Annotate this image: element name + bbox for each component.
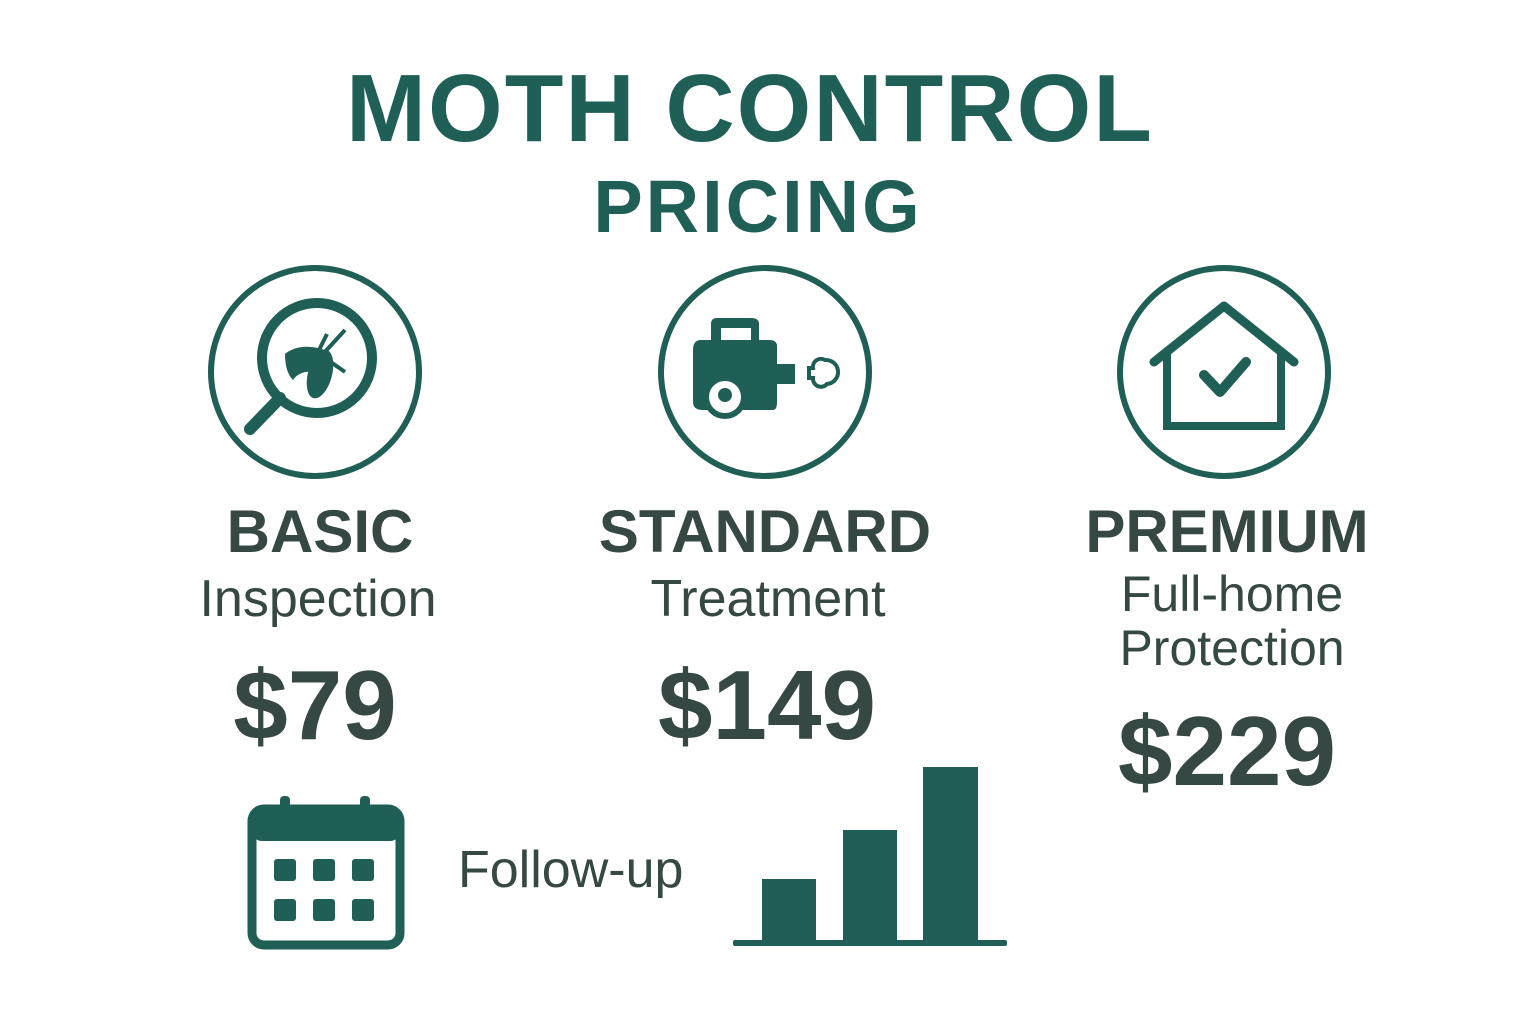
premium description: Protection	[1119, 620, 1345, 676]
tier: basic	[199, 498, 437, 760]
tier: premium	[1085, 498, 1369, 806]
basic description: Inspection	[199, 570, 437, 628]
premium price: $229	[1118, 696, 1336, 806]
standard price: $149	[658, 650, 876, 760]
premium description	[1119, 566, 1345, 676]
follow-up label: Follow-up	[458, 841, 683, 899]
subtitle: PRICING	[593, 165, 923, 248]
premium name: PREMIUM	[1085, 498, 1369, 565]
bar chart	[733, 767, 1007, 946]
tier: standard	[599, 498, 931, 760]
icon: calendar	[248, 796, 404, 950]
basic price: $79	[233, 650, 397, 760]
standard name: STANDARD	[599, 498, 931, 565]
basic name: BASIC	[227, 498, 413, 565]
icon: house with check	[1117, 265, 1331, 479]
premium description: Full-home	[1121, 566, 1343, 622]
icon: sprayer machine	[658, 265, 872, 479]
icon: magnifier with moth	[208, 265, 422, 479]
title: MOTH CONTROL	[346, 55, 1154, 162]
standard description: Treatment	[650, 570, 886, 628]
